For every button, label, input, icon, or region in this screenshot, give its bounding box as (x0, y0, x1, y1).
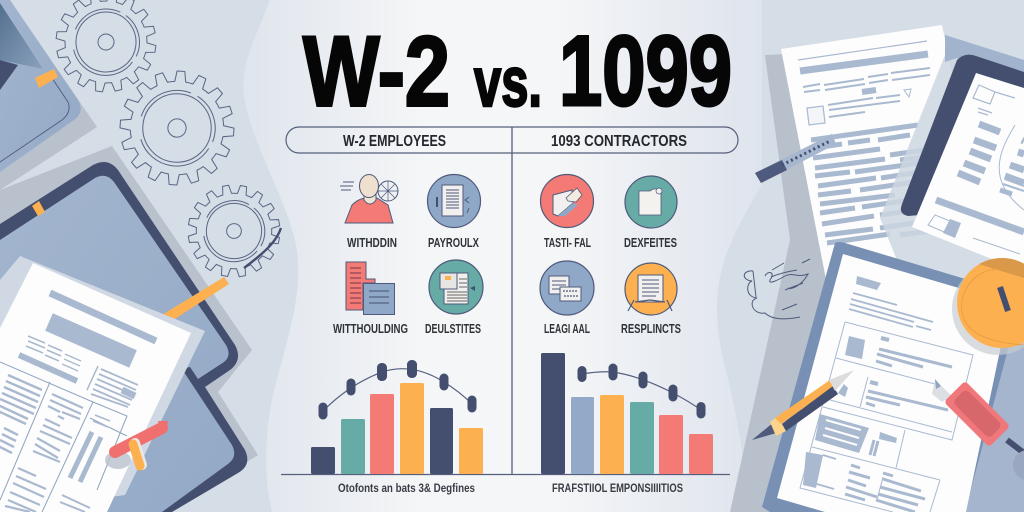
center light panel (243, 0, 762, 512)
coin slot (1000, 287, 1008, 311)
heading: 1099 contractors: 1093 CONTRACTORS (551, 133, 687, 150)
right top paper (730, 25, 1024, 512)
gear 1 (50, 0, 162, 98)
label: LEAGI AAL (544, 322, 590, 336)
label: DEULSTITES (425, 322, 481, 336)
title: 1099 (559, 15, 732, 126)
lower left tablets (0, 146, 258, 512)
navy stub (1007, 440, 1024, 453)
title (303, 15, 732, 126)
left bar chart (281, 360, 512, 474)
icon: deductions (429, 260, 483, 314)
paper contents (798, 41, 945, 243)
label: DEXFEITES (624, 236, 677, 250)
label: WITTHOULDING (333, 322, 408, 336)
document sheet (912, 73, 1024, 272)
trend line (582, 372, 701, 410)
pen on paper (755, 134, 836, 183)
label: PAYROULX (428, 236, 479, 250)
header pill (286, 127, 738, 153)
gear 2 (116, 67, 238, 189)
yellow tab (32, 201, 45, 216)
gear 3 (180, 177, 288, 285)
left caption: Otofonts an bats 3& Degfines (338, 483, 475, 495)
icon: payroll (428, 174, 480, 228)
yellow tab (35, 69, 58, 88)
icon: teal circle (625, 176, 677, 228)
red clip (105, 451, 131, 469)
label: WITHDDIN (347, 236, 397, 250)
paper contents (0, 293, 156, 512)
divider (511, 127, 513, 474)
eraser (932, 379, 1010, 447)
right upper tablet (880, 35, 1024, 280)
title: W-2 (303, 16, 450, 126)
heading: W-2 employees: W-2 EMPLOYEES (343, 133, 446, 150)
trend line (323, 369, 472, 411)
gears (50, 0, 288, 285)
icon: stacked documents (346, 262, 394, 314)
gear pen stroke (244, 228, 281, 268)
paper (0, 263, 191, 512)
icon: coral circle (540, 174, 594, 228)
label: RESPLINCTS (621, 322, 681, 336)
clipboard sheet (777, 254, 1010, 512)
rear paper (0, 256, 205, 512)
icon: blue circle (540, 261, 594, 315)
right bar chart (512, 353, 730, 474)
clipboard (752, 242, 1022, 512)
top left tablet (0, 0, 97, 190)
scribble (744, 259, 810, 319)
pencil (752, 370, 854, 440)
title: vs. (474, 43, 542, 121)
label: TASTI- FAL (544, 236, 591, 250)
icon: person (340, 174, 398, 223)
pencil (157, 277, 229, 322)
icon: orange circle (625, 263, 677, 315)
right caption: FRAFSTIIOL EMPONSIIIITIOS (552, 483, 683, 495)
lower right background (955, 330, 1024, 512)
coin (952, 255, 1024, 355)
